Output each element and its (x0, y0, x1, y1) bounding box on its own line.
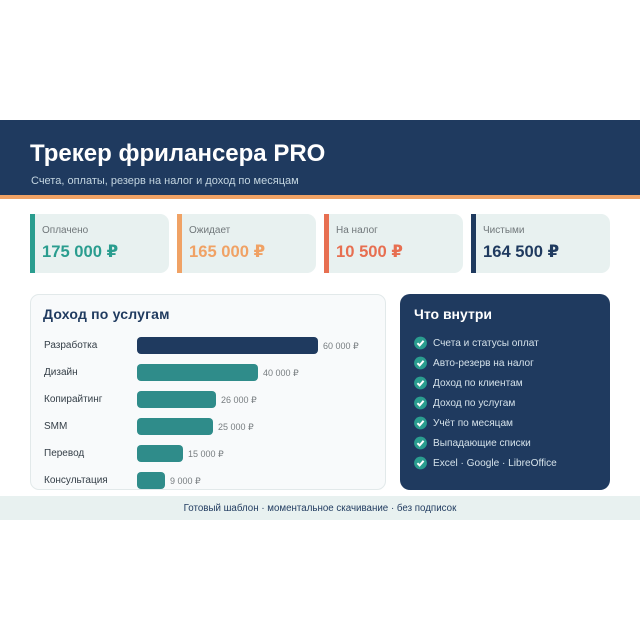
panel heading: Что внутри (414, 306, 492, 322)
header banner (0, 120, 640, 199)
bar chart: Копирайтинг (44, 394, 102, 405)
title: Трекер фрилансера PRO (30, 140, 325, 167)
chart heading: Доход по услугам (43, 306, 170, 322)
footer strip: Готовый шаблон · моментальное скачивание · без подписок (184, 503, 456, 514)
card: pending (177, 214, 316, 273)
panel: what's inside (400, 294, 610, 490)
item: monthly (414, 416, 513, 430)
card: paid: Оплачено (42, 225, 88, 236)
card: tax (324, 214, 463, 273)
item: income by client: Доход по клиентам (433, 378, 523, 389)
bar chart: Перевод (44, 448, 84, 459)
item: income by service (414, 396, 515, 410)
bar chart: SMM (44, 421, 67, 432)
card: net: 164 500 ₽ (483, 242, 559, 261)
subtitle: Счета, оплаты, резерв на налог и доход по месяцам (31, 175, 299, 187)
item: invoices: Счета и статусы оплат (433, 338, 539, 349)
card: paid (30, 214, 169, 273)
bar chart: Консультация (44, 475, 108, 486)
card: net (471, 214, 610, 273)
card: paid: 175 000 ₽ (42, 242, 118, 261)
card: pending: Ожидает (189, 225, 230, 236)
bar chart: 40 000 ₽ (263, 368, 299, 378)
card: net: Чистыми (483, 225, 524, 236)
footer strip (0, 496, 640, 520)
bar chart: Разработка (44, 340, 97, 351)
bar chart (44, 337, 359, 489)
bar chart: 25 000 ₽ (218, 422, 254, 432)
bar chart: 9 000 ₽ (170, 476, 201, 486)
card: tax: На налог (336, 225, 378, 236)
item: compatibility: Excel · Google · LibreOffice (433, 458, 557, 469)
item: dropdowns: Выпадающие списки (433, 438, 531, 449)
bar chart: 26 000 ₽ (221, 395, 257, 405)
bar chart: 60 000 ₽ (323, 341, 359, 351)
bar chart: Дизайн (44, 367, 78, 378)
panel: income by service (30, 294, 386, 490)
item: monthly: Учёт по месяцам (433, 418, 513, 429)
card: tax: 10 500 ₽ (336, 242, 403, 261)
item: income by client (414, 376, 523, 390)
item: tax reserve: Авто-резерв на налог (433, 358, 534, 369)
card: pending: 165 000 ₽ (189, 242, 265, 261)
bar chart: 15 000 ₽ (188, 449, 224, 459)
item: income by service: Доход по услугам (433, 398, 515, 409)
